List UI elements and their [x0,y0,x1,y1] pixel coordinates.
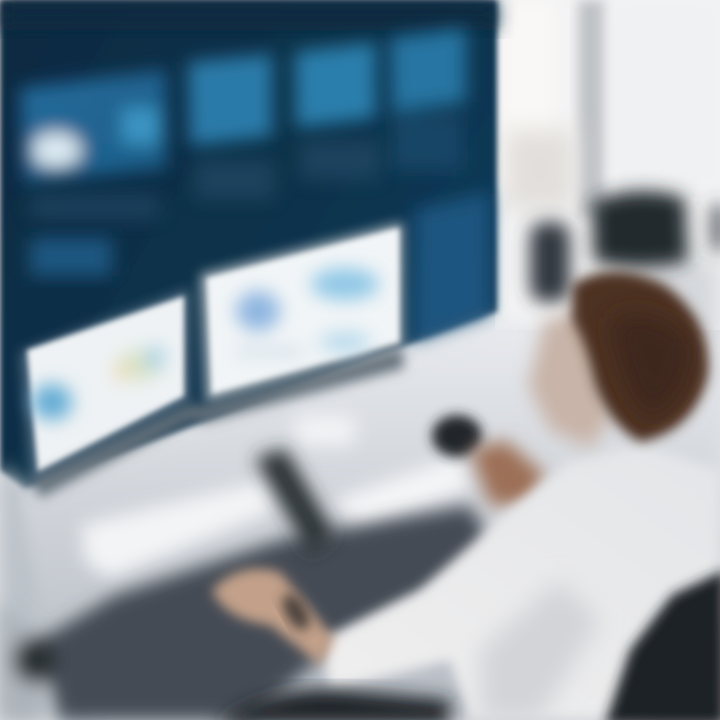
phone stand [255,448,335,555]
left monitor chart blobs [32,346,165,420]
dashboard tile 1 [20,70,166,182]
dark desk mat [0,505,500,720]
torso: white shirt [322,445,720,720]
left monitor [20,288,190,486]
phone in hand [432,415,545,505]
watch [277,590,315,634]
background monitors: dark silhouettes [530,191,720,302]
person [212,272,720,720]
dashboard right tile [413,192,490,345]
hair [572,272,708,442]
dashboard faint text rows [30,140,380,219]
face [528,310,610,448]
dashboard tile 4 [390,28,466,170]
right monitor chart blobs [235,268,379,359]
left wall edge and desk base [0,320,720,720]
right monitor [200,222,403,404]
keyboard [82,415,470,578]
office chair [605,570,720,720]
left hand on desk [212,569,335,665]
wall display: navy dashboard [0,0,497,490]
foreground dark shadow [215,689,450,720]
dashboard tile 2 [188,54,272,146]
monitor base bar [32,348,404,498]
raised hand and forearm [470,440,545,505]
dashboard lower tile [30,238,112,276]
dashboard tile 3 [295,42,376,128]
